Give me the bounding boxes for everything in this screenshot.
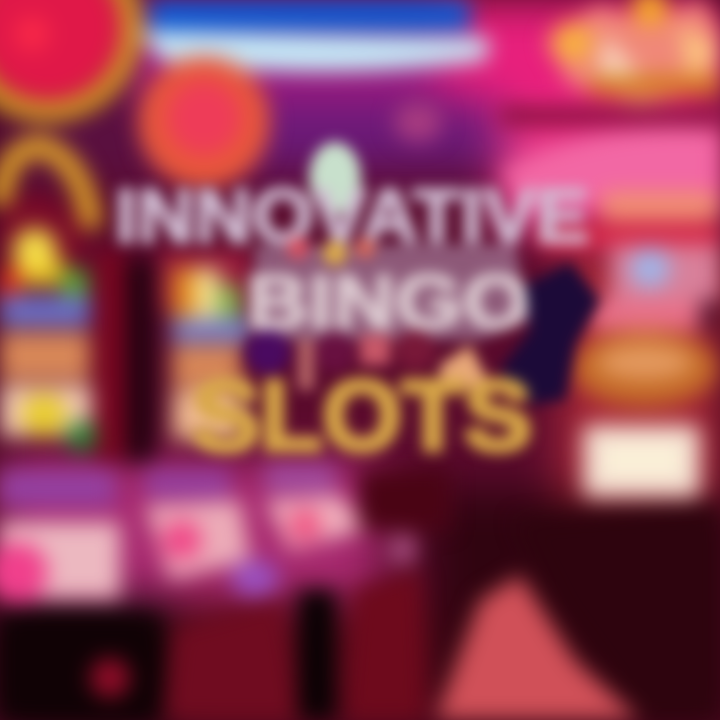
glowing light above title [309,142,361,214]
top-left heart wheel [0,0,132,112]
left arch and machine [0,146,97,451]
title line: bingo: BINGO [246,260,530,345]
round red emblem [138,56,442,188]
second machine [160,250,252,440]
lower row of machines [0,465,415,602]
floor and seats [0,470,720,720]
top-right golden sign [500,0,720,126]
pink canopy right [500,128,720,248]
colored lights under title [287,237,375,265]
title line: innovative: INNOVATIVE [115,174,589,259]
haze behind title [255,245,530,340]
reels and dark windows [246,262,600,405]
right slot machine [573,245,720,497]
ceiling blue dome [140,0,490,72]
dark cabinet pillar [96,250,154,460]
title line: slots: SLOTS [192,360,532,472]
title: blurred logo text [115,142,600,472]
